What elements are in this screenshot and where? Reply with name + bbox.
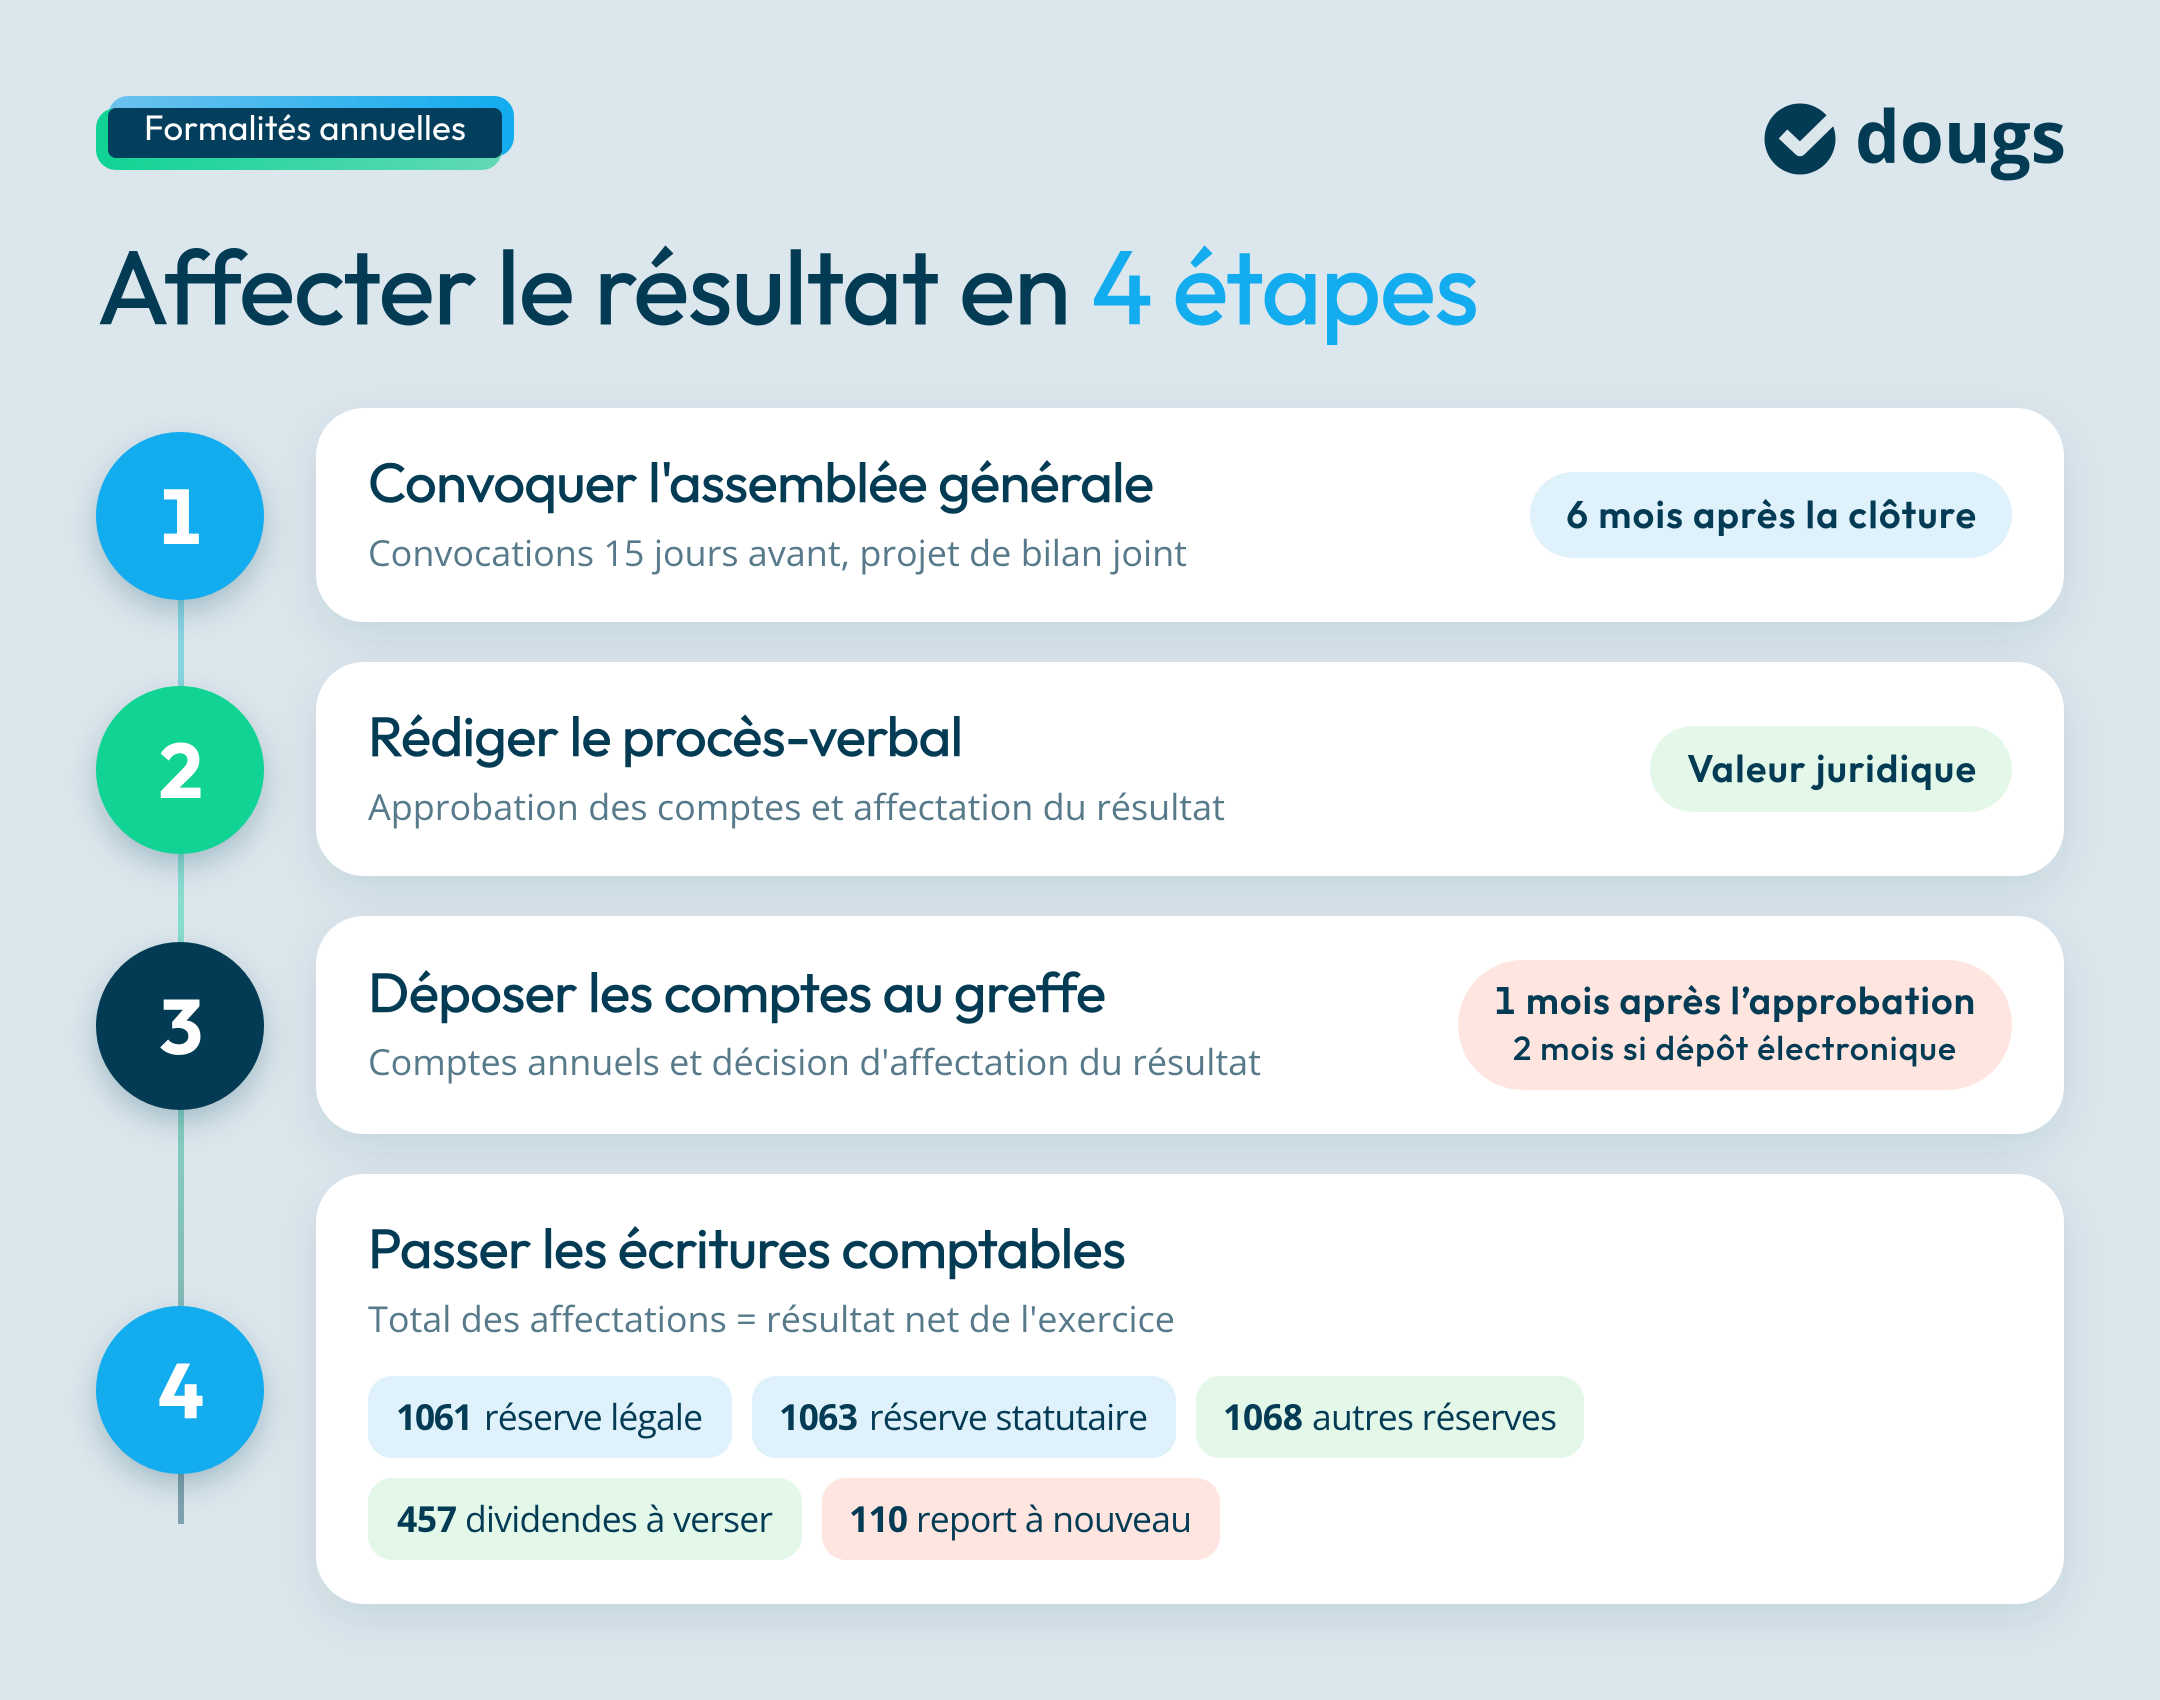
step 3 heading: Déposer les comptes au greffe	[368, 956, 1106, 1027]
chip: 457: 457	[397, 1495, 457, 1543]
chip: 1061	[368, 1376, 732, 1458]
chip: 1063: 1063	[779, 1393, 858, 1441]
pill: filing deadlines	[1458, 960, 2012, 1090]
pill: deadline: 6 mois après la clôture	[1566, 490, 1976, 538]
step 2 number	[96, 686, 264, 866]
timeline connector	[178, 432, 184, 1524]
panel: step 1 card	[316, 408, 2064, 622]
step 1 number: 1	[158, 468, 204, 565]
panel: step 2 card	[316, 662, 2064, 876]
step 2 heading: Rédiger le procès-verbal	[368, 700, 963, 771]
logo: dougs	[1764, 86, 2066, 185]
chip: 1063: réserve statutaire	[869, 1393, 1148, 1441]
pill: deadline	[1530, 472, 2012, 558]
chip: 110: 110	[849, 1495, 908, 1543]
chip: 1061: réserve légale	[484, 1393, 703, 1441]
step 2 number: 2	[158, 722, 204, 819]
title: Affecter le résultat en	[97, 221, 1071, 352]
step 4 number: 4	[158, 1342, 204, 1439]
badge: Formalités annuelles: Formalités annuelles	[144, 106, 466, 150]
chip: 1063	[752, 1376, 1176, 1458]
step 3 number: 3	[158, 978, 204, 1075]
step 4 heading: Passer les écritures comptables	[368, 1212, 1126, 1283]
step 2 description: Approbation des comptes et affectation du résultat	[368, 782, 1225, 831]
chip: 1068: autres réserves	[1312, 1393, 1557, 1441]
chip: 1061: 1061	[396, 1393, 473, 1441]
pill: filing deadlines: 1 mois après l’approbation	[1494, 976, 1975, 1024]
step 3 description: Comptes annuels et décision d'affectation du résultat	[368, 1037, 1261, 1086]
step 4 number	[96, 1306, 264, 1486]
chip: 457: dividendes à verser	[465, 1495, 773, 1543]
badge: Formalités annuelles	[96, 96, 514, 170]
chip: 1068: 1068	[1223, 1393, 1303, 1441]
chip: 110	[822, 1478, 1220, 1560]
chip: 457	[368, 1478, 802, 1560]
step 3 number	[96, 942, 264, 1122]
card shadows	[316, 424, 2064, 1620]
chip: 110: report à nouveau	[916, 1495, 1192, 1543]
pill: legal value: Valeur juridique	[1687, 744, 1976, 792]
chip: 1068	[1196, 1376, 1584, 1458]
pill: filing deadlines: 2 mois si dépôt électronique	[1513, 1026, 1956, 1069]
panel: step 4 card	[316, 1174, 2064, 1604]
logo: dougs: dougs	[1855, 86, 2066, 185]
step 1 number	[96, 432, 264, 612]
pill: legal value	[1650, 726, 2012, 812]
step 4 description: Total des affectations = résultat net de l'exercice	[368, 1294, 1175, 1343]
step 1 heading: Convoquer l'assemblée générale	[368, 446, 1154, 517]
step 1 description: Convocations 15 jours avant, projet de bilan joint	[368, 528, 1187, 577]
panel: step 3 card	[316, 916, 2064, 1134]
title: 4 étapes	[1091, 221, 1479, 352]
